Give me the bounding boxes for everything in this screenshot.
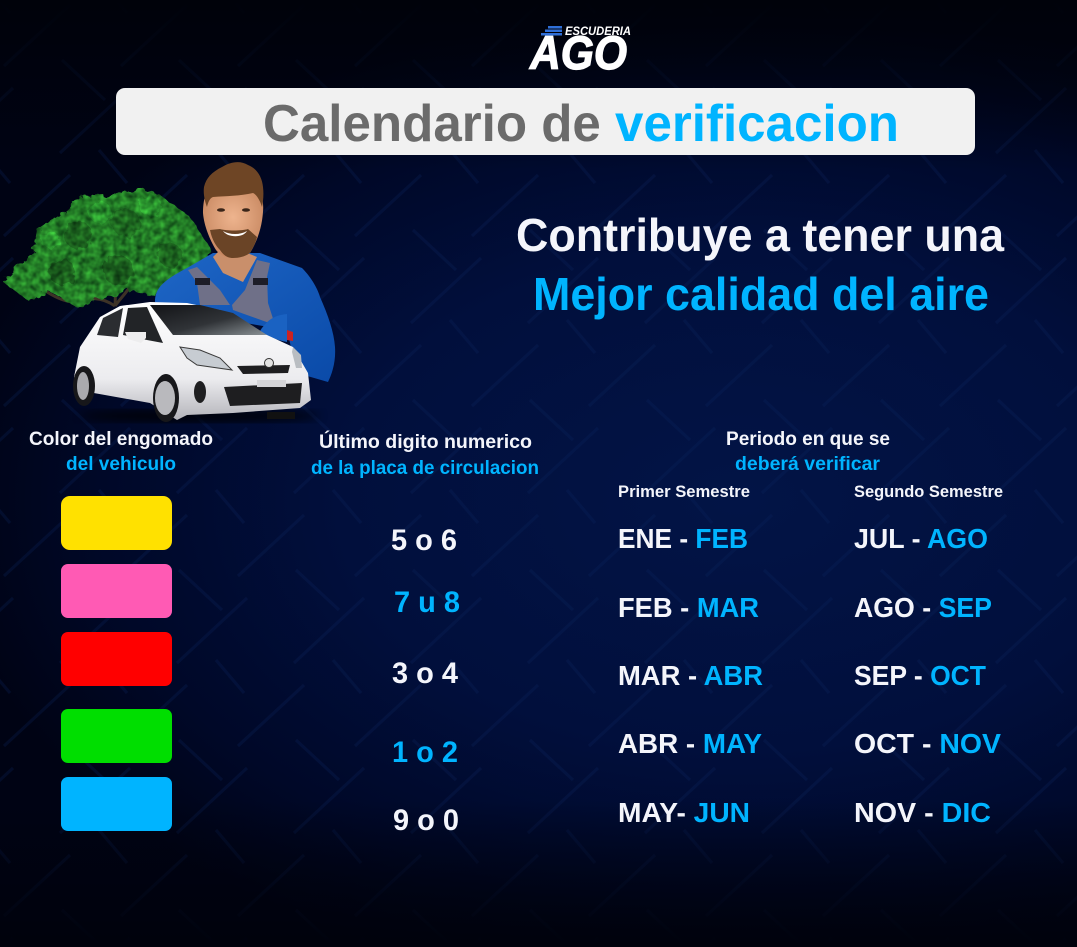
plate digits: 7 u 8	[394, 586, 460, 619]
first semester months: FEB - MAR	[618, 592, 759, 623]
second semester months: SEP - OCT	[854, 660, 986, 691]
icon: logo stripes	[541, 26, 562, 36]
icon: white car	[73, 302, 311, 422]
title text: Calendario de verificacion	[263, 95, 899, 153]
subheading: second semester: Segundo Semestre	[854, 482, 1003, 501]
title banner	[116, 88, 975, 155]
headline line 2: Mejor calidad del aire	[533, 268, 989, 320]
headline line 1: Contribuye a tener una	[516, 209, 1004, 261]
first semester months	[618, 523, 763, 828]
second semester months: OCT - NOV	[854, 728, 1001, 759]
plate digits: 5 o 6	[391, 524, 457, 557]
logo wordmark small: ESCUDERIA	[565, 24, 631, 38]
first semester months: ABR - MAY	[618, 728, 762, 759]
logo: Escuderia AGO	[529, 24, 631, 79]
column heading: digit: Último digito numerico	[319, 431, 532, 453]
icon: tree	[3, 188, 212, 308]
column heading: color: del vehiculo	[66, 454, 176, 475]
plate digits: 9 o 0	[393, 804, 459, 837]
plate digits: 3 o 4	[392, 657, 458, 690]
plate digits	[391, 524, 460, 837]
plate digits: 1 o 2	[392, 736, 458, 769]
column heading: digit	[311, 431, 539, 479]
column heading: digit: de la placa de circulacion	[311, 458, 539, 479]
column heading: period: Periodo en que se	[726, 429, 890, 450]
logo wordmark large: AGO	[529, 26, 627, 79]
column heading: color: Color del engomado	[29, 429, 213, 450]
first semester months: MAR - ABR	[618, 660, 763, 691]
first semester months: ENE - FEB	[618, 523, 748, 554]
subheading: first semester: Primer Semestre	[618, 482, 750, 501]
icon: car shadow	[80, 410, 320, 422]
column heading: color	[29, 429, 213, 475]
headline	[516, 209, 1004, 320]
second semester months: JUL - AGO	[854, 523, 988, 554]
illustration: tree, mechanic and car	[3, 162, 335, 422]
second semester months: AGO - SEP	[854, 592, 992, 623]
icon: mechanic	[155, 162, 335, 382]
second semester months: NOV - DIC	[854, 797, 991, 828]
column heading: period: deberá verificar	[735, 454, 881, 475]
first semester months: MAY- JUN	[618, 797, 750, 828]
second semester months	[854, 523, 1001, 828]
column heading: period	[726, 429, 890, 475]
color swatches	[61, 496, 172, 831]
